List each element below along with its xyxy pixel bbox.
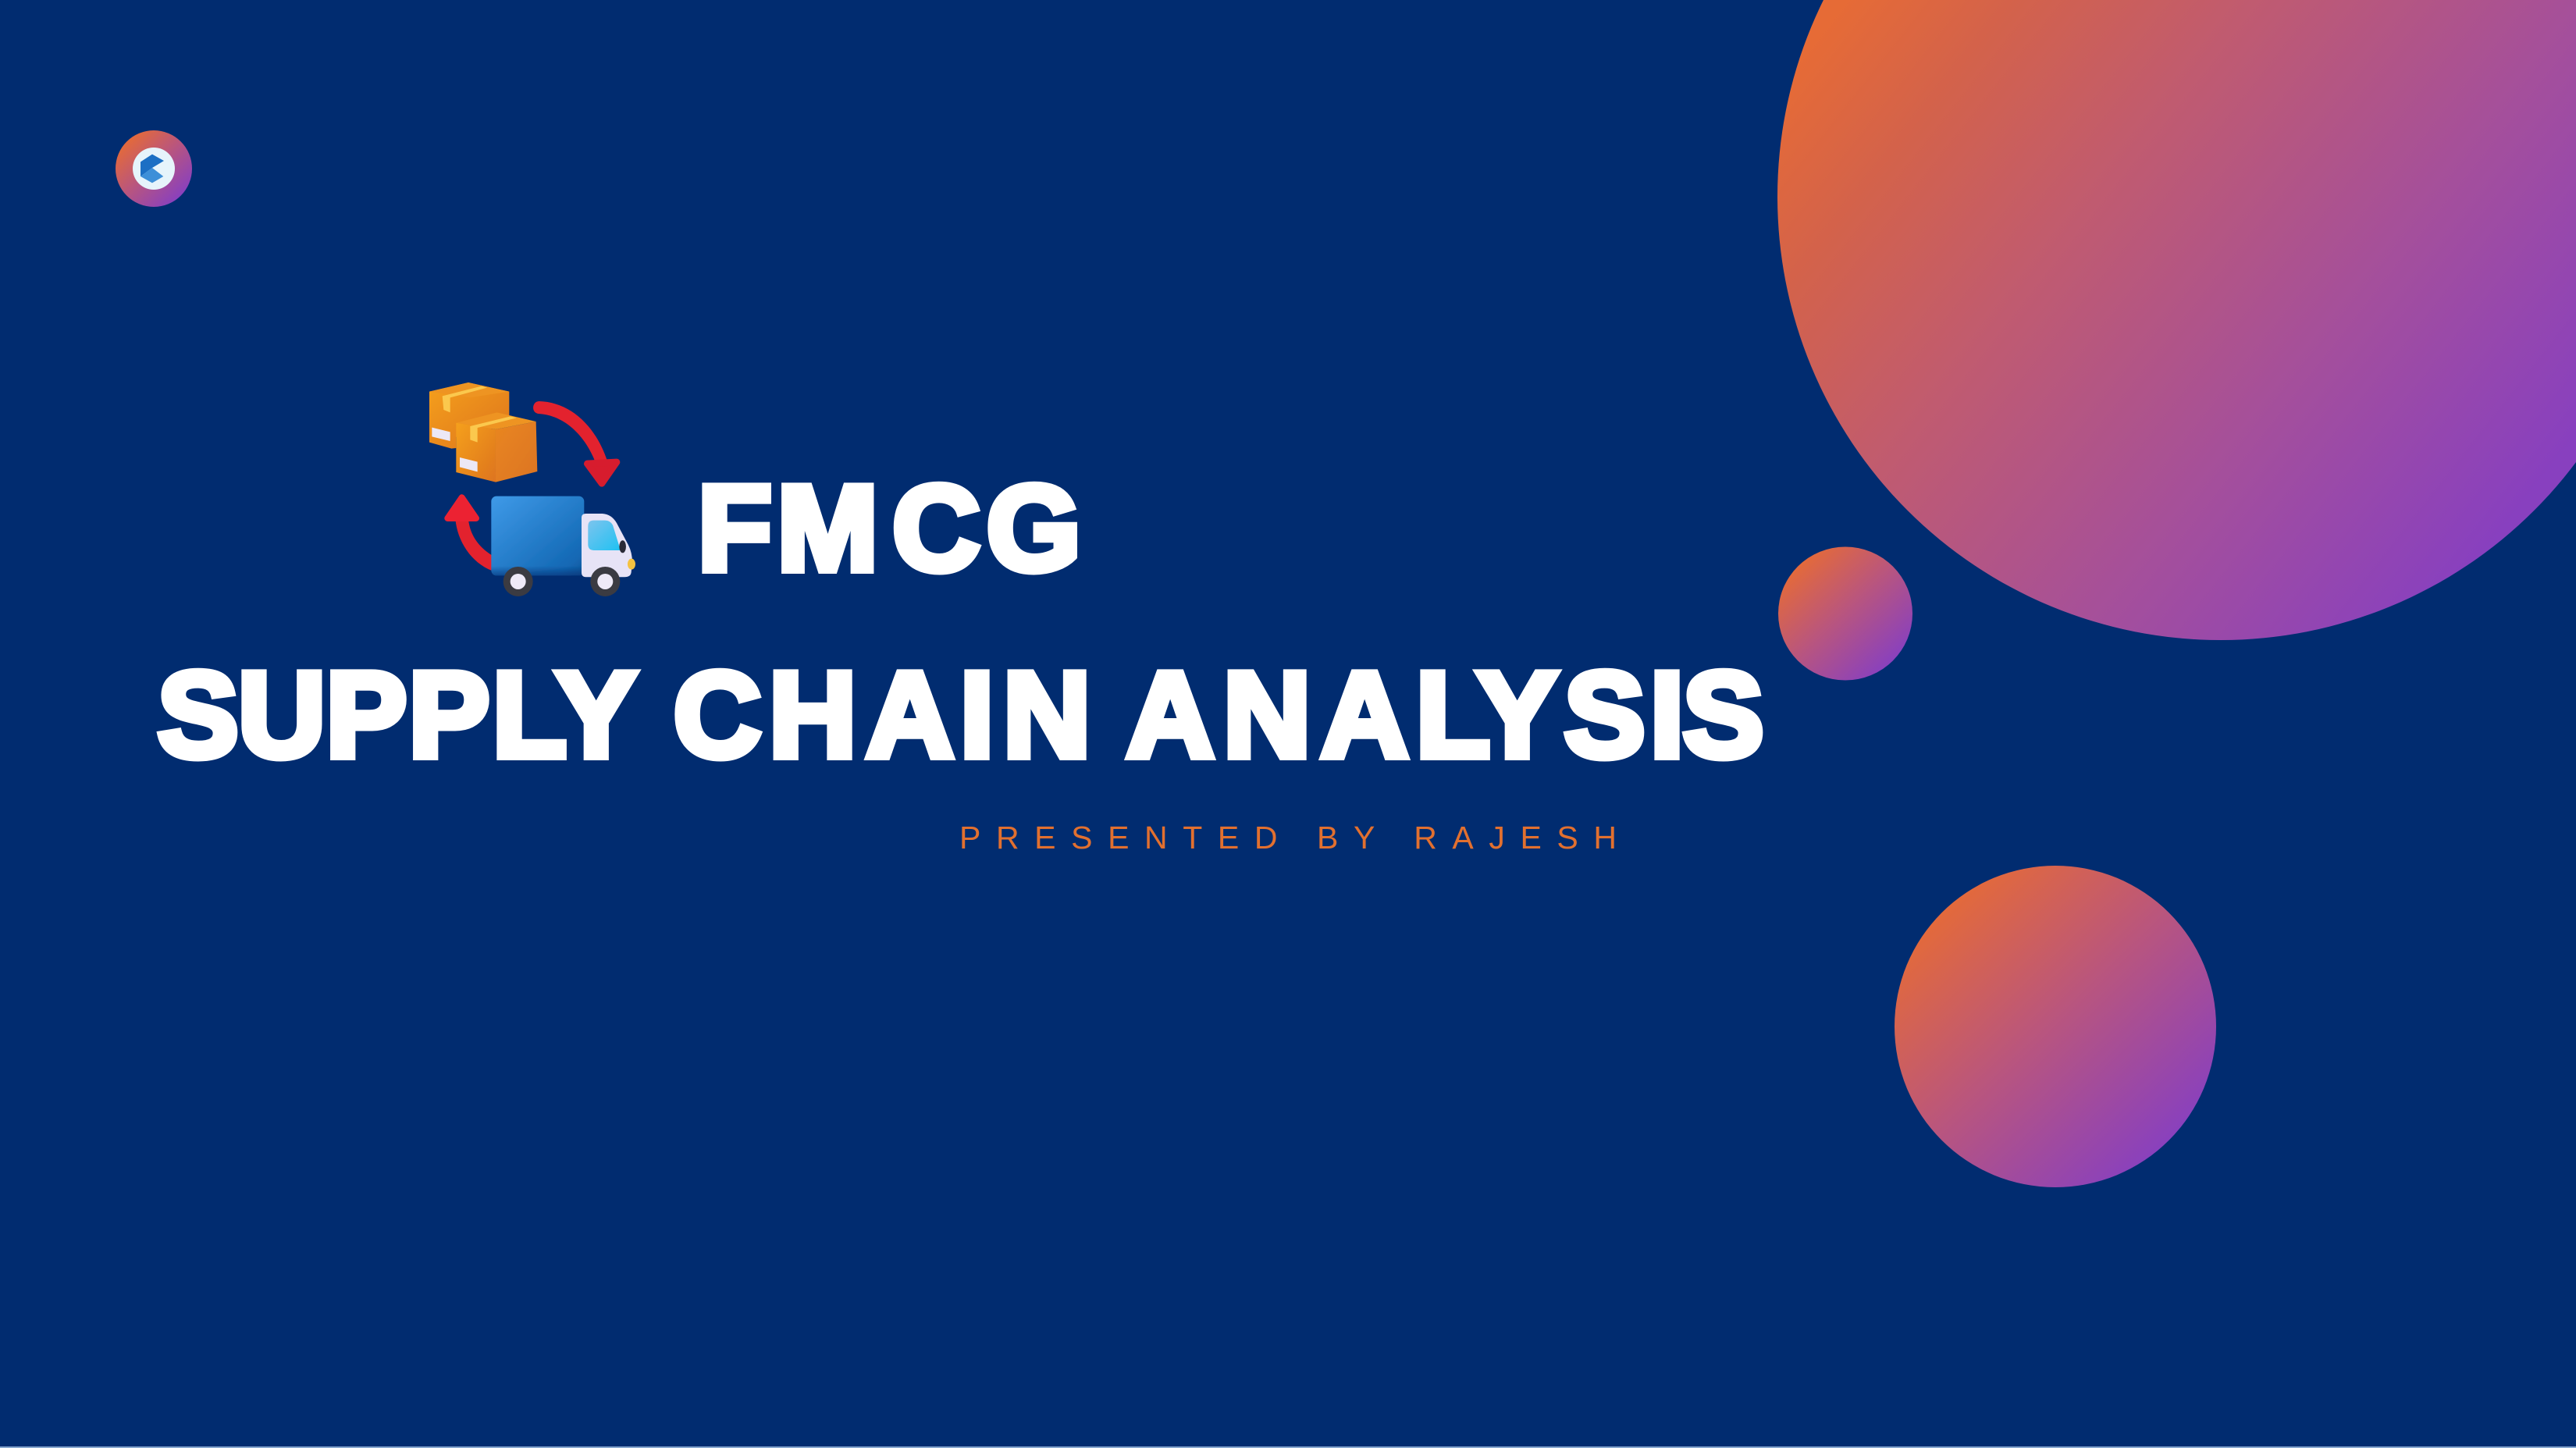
arrow: boxes to truck — [533, 401, 617, 483]
heading: supply chain analysis: SUPPLY CHAIN ANALYSIS — [158, 647, 1763, 782]
large gradient circle top right — [1777, 0, 2576, 640]
medium gradient circle — [1895, 866, 2216, 1187]
subtitle: presenter: PRESENTED BY RAJESH — [959, 820, 1617, 856]
heading: FMCG: FMCG — [698, 461, 1081, 596]
icon: rear cardboard box — [429, 382, 509, 449]
logo badge — [116, 130, 192, 207]
small gradient circle — [1778, 546, 1912, 681]
arrow: truck to boxes — [447, 497, 493, 571]
icon: delivery truck — [491, 496, 635, 596]
icon: front cardboard box — [456, 412, 537, 482]
icon: boxes and delivery truck cycle — [429, 382, 635, 596]
